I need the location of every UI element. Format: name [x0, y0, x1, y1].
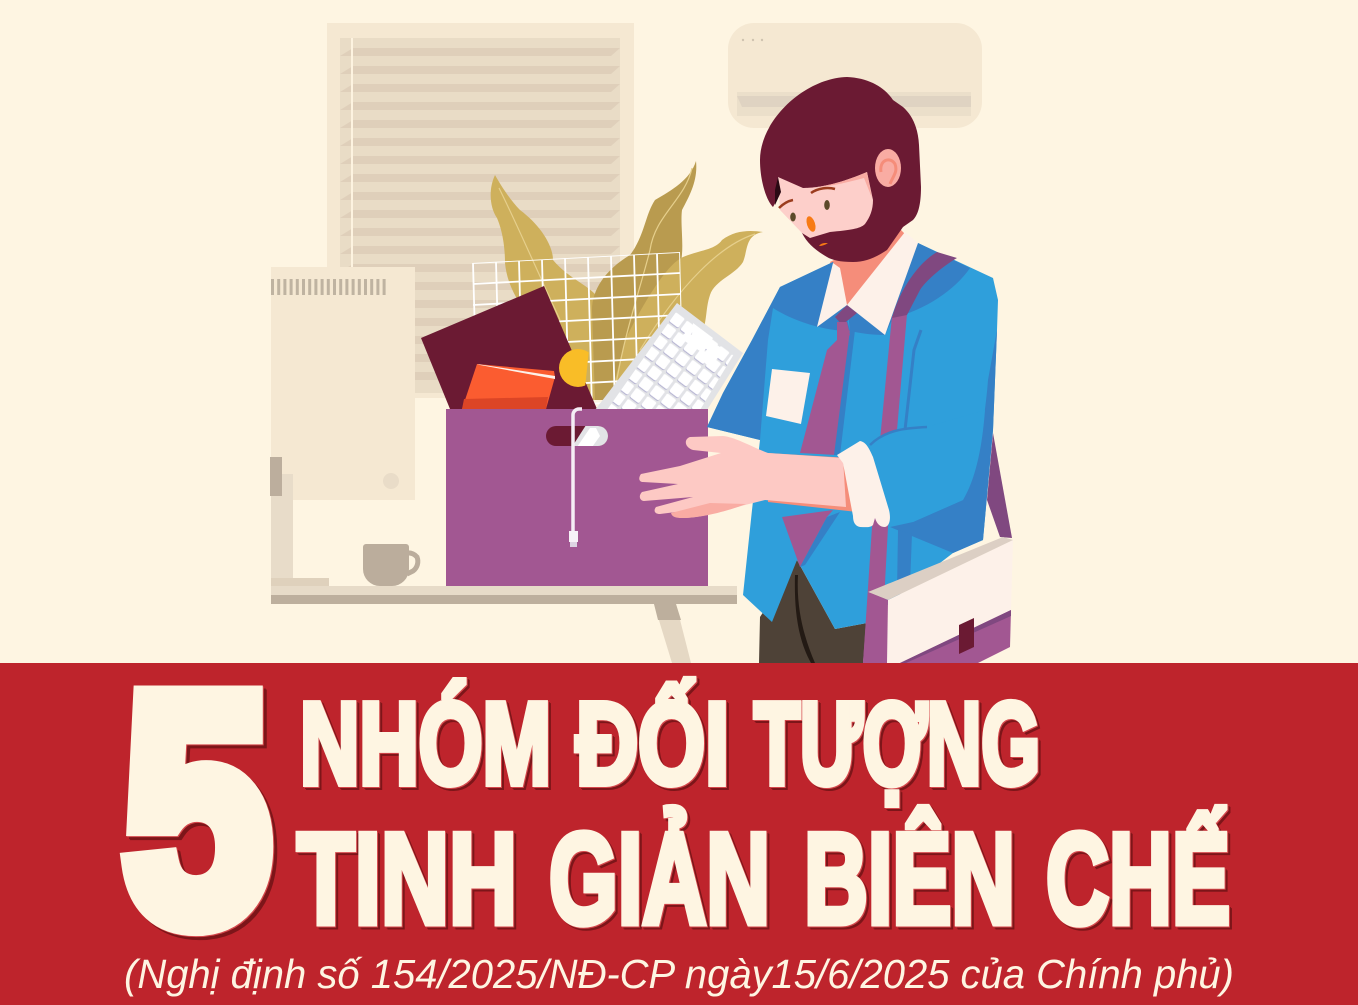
computer monitor [270, 267, 415, 586]
air conditioner [728, 23, 982, 128]
shoulder bag [863, 537, 1013, 663]
eyebrows [779, 188, 835, 208]
rolled cuff [837, 441, 890, 527]
white cable [569, 409, 582, 547]
orange book [462, 364, 555, 409]
shoulder strap [863, 252, 957, 663]
desk [271, 586, 737, 663]
keyboard [595, 303, 743, 410]
dark folder [421, 286, 597, 409]
title line 2 [297, 806, 1230, 951]
shirt [707, 243, 998, 629]
trousers [759, 560, 867, 663]
tie [782, 305, 857, 567]
title line 1: NHÓM [300, 678, 551, 808]
coffee cup [363, 544, 418, 586]
arm and hand [639, 436, 857, 518]
red title banner [0, 663, 1358, 1005]
shirt collar [817, 232, 918, 335]
ear [875, 149, 901, 187]
title line 2: BIÊN [804, 806, 1015, 951]
title line 2: TINH [297, 807, 517, 951]
subtitle: (Nghị định số 154/2025/NĐ-CP ngày15/6/2025 của Chính phủ) [124, 951, 1234, 997]
nose [805, 215, 817, 233]
name badge [766, 369, 810, 424]
title line 1 [300, 678, 1040, 808]
title line 2: CHẾ [1046, 806, 1230, 951]
title line 1: ĐỐI [576, 678, 729, 808]
hair tuft [775, 177, 781, 205]
title number 5: 5 [124, 630, 270, 989]
arm sleeve [870, 410, 985, 522]
face [778, 172, 873, 238]
back bag strap [987, 433, 1012, 538]
title line 1: TƯỢNG [754, 678, 1040, 808]
eyes [790, 200, 830, 222]
fringe shadow [803, 172, 872, 198]
title line 2: GIẢN [549, 806, 770, 951]
illustration: office scene [270, 23, 982, 663]
hair and beard [760, 77, 921, 262]
head [760, 77, 921, 262]
window blinds [327, 23, 634, 398]
neck [830, 227, 906, 320]
wire grid [473, 252, 682, 410]
illustration: man with bag [639, 77, 1013, 663]
purple box [446, 409, 708, 586]
yellow disc [559, 349, 589, 387]
plant leaves [491, 161, 763, 400]
mouth [819, 243, 828, 246]
